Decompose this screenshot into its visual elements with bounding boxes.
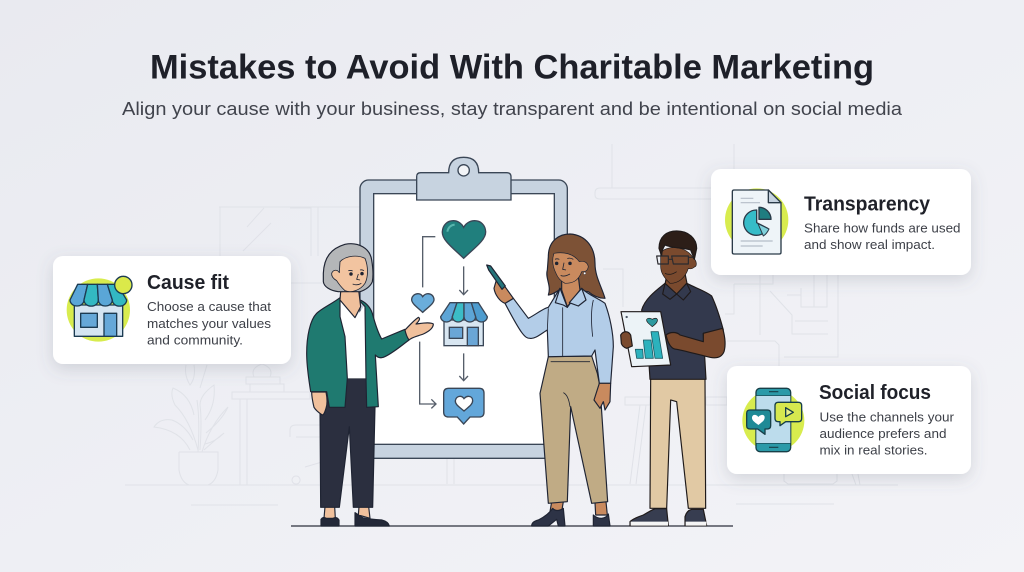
trousers [650, 379, 706, 508]
clip hole [458, 165, 469, 176]
collar [663, 283, 691, 300]
card: cause fit [53, 256, 291, 364]
face [553, 253, 588, 283]
store icon [441, 303, 487, 346]
arrow heart to store [459, 266, 468, 295]
ankles [324, 507, 370, 518]
card: social focus [727, 366, 971, 474]
clipboard frame [360, 180, 567, 458]
person: older woman in green cardigan [307, 244, 433, 526]
shoes [321, 513, 389, 526]
glasses [657, 256, 693, 264]
collar [555, 288, 586, 307]
social bubble with heart [444, 388, 484, 424]
heading: Transparency [804, 194, 931, 216]
shirt [505, 288, 613, 383]
neck [340, 290, 361, 318]
description: mix in real stories. [820, 442, 928, 458]
description: Share how funds are used [804, 220, 960, 236]
forearm [666, 328, 725, 358]
hair [659, 231, 697, 259]
description: Choose a cause that [147, 299, 271, 314]
facial features [348, 270, 364, 285]
description [804, 220, 960, 252]
description: audience prefers and [820, 426, 946, 441]
clipboard clip [417, 157, 511, 200]
shoes [630, 509, 707, 526]
trousers [540, 356, 608, 503]
card: transparency [711, 169, 971, 275]
facial features [555, 258, 573, 276]
description: and show real impact. [804, 237, 935, 252]
hands [312, 317, 433, 415]
ground line [291, 525, 733, 527]
neck [665, 273, 687, 294]
neck [562, 277, 580, 307]
description: and community. [147, 332, 243, 348]
trousers [320, 378, 375, 507]
heading: Cause fit [147, 272, 229, 294]
description [147, 299, 272, 348]
title: Mistakes to Avoid With Charitable Marketing [150, 48, 874, 86]
cardigan left [307, 298, 347, 407]
head [661, 248, 696, 283]
clipboard with flow diagram [360, 157, 567, 458]
hair [547, 234, 605, 298]
large teal heart [442, 221, 486, 258]
small blue heart [412, 294, 434, 312]
arrow store to bubble [459, 353, 468, 381]
clipboard paper [374, 194, 554, 444]
connector top [423, 237, 435, 287]
subtitle: Align your cause with your business, stay transparent and be intentional on social media [122, 98, 903, 119]
person: man holding tablet [621, 231, 725, 526]
pen [487, 265, 505, 289]
description: matches your values [147, 316, 272, 331]
holding hand [621, 332, 632, 348]
white top [339, 300, 366, 378]
face [332, 256, 367, 292]
lower hand [594, 383, 611, 410]
person: woman in blue shirt pointing [487, 234, 613, 526]
description: Use the channels your [820, 410, 955, 424]
cardigan right and arm [358, 299, 409, 407]
hair [323, 244, 373, 292]
description [820, 410, 955, 458]
pointing hand [494, 277, 513, 303]
background line art [125, 144, 898, 505]
heading: Social focus [819, 382, 931, 404]
tablet [621, 312, 671, 367]
icon: store [67, 276, 132, 342]
mouth [665, 272, 677, 274]
icon: report document with pie chart [725, 188, 788, 254]
polo shirt [642, 283, 723, 379]
connector bottom [420, 342, 436, 408]
ankles and shoes [550, 502, 607, 515]
icon: phone with chat bubbles [742, 388, 804, 452]
